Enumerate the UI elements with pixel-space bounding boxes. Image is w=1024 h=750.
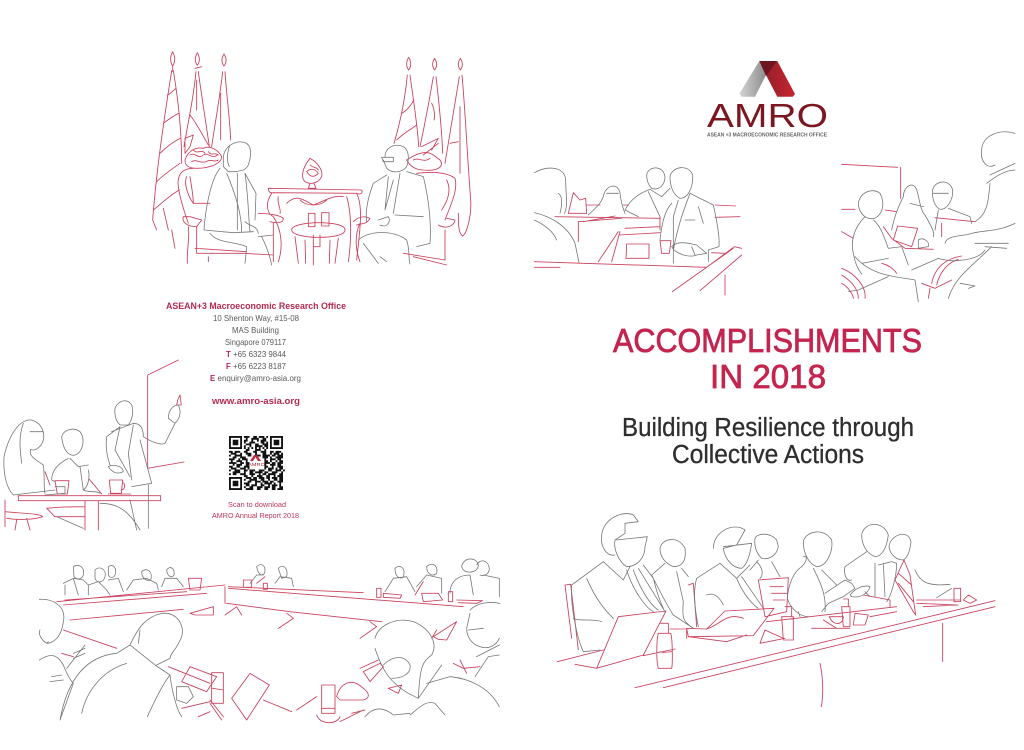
conference tables and objects [57,577,483,723]
address line 3: Singapore 079117 [225,337,286,347]
delegates around the table [39,559,500,720]
seated officials [204,142,430,265]
QR code [229,437,285,489]
finder centres [233,440,279,486]
finder patterns [230,437,282,489]
illustration: bilateral meeting with flags [153,52,471,265]
illustration: conversation over a desk [534,168,742,295]
website: www.amro-asia.org [211,396,300,407]
subtitle line 1: Building Resilience through [622,414,914,442]
title [613,323,922,396]
desk, papers and cup [534,193,742,295]
logo tagline: ASEAN +3 MACROECONOMIC RESEARCH OFFICE [707,132,827,138]
logo mark red band [766,61,795,97]
board, table, cups [5,360,184,530]
logo wordmark: AMRO [707,97,828,134]
illustration: panel of delegates at long table [557,514,995,707]
logo: AMRO [707,61,828,138]
QR caption line 1: Scan to download [228,500,286,509]
email: E enquiry@amro-asia.org [210,373,301,383]
illustration: small group discussion [842,132,1015,302]
illustration: round-table conference [39,559,500,723]
logo mark grey band [740,61,766,97]
four people around table [848,132,1015,302]
title line 1: ACCOMPLISHMENTS [613,323,922,360]
colleagues in conversation [534,168,719,263]
fax: F +65 6223 8187 [226,361,286,371]
contact details block [166,300,346,520]
data modules [229,437,285,489]
illustration: presenter at whiteboard [4,360,184,530]
address line 1: 10 Shenton Way, #15-08 [213,313,299,323]
seated delegates [571,514,952,652]
address line 2: MAS Building [232,325,279,335]
subtitle line 2: Collective Actions [672,441,864,469]
logo mark dark overlap [759,61,777,76]
QR caption line 2: AMRO Annual Report 2018 [212,511,299,520]
QR centre AMRO mini logo [248,455,266,467]
table, laptops, bottles and flag [557,560,995,707]
flags and ornate furniture [153,52,471,265]
subtitle [622,414,914,469]
organisation name: ASEAN+3 Macroeconomic Research Office [166,300,346,311]
mini logo mark [250,455,261,461]
title line 2: IN 2018 [710,359,826,396]
telephone: T +65 6323 9844 [226,349,286,359]
mini logo text: AMRO [248,462,266,467]
room lines, laptop and chairs [842,164,975,298]
attendees and presenter [4,401,180,530]
